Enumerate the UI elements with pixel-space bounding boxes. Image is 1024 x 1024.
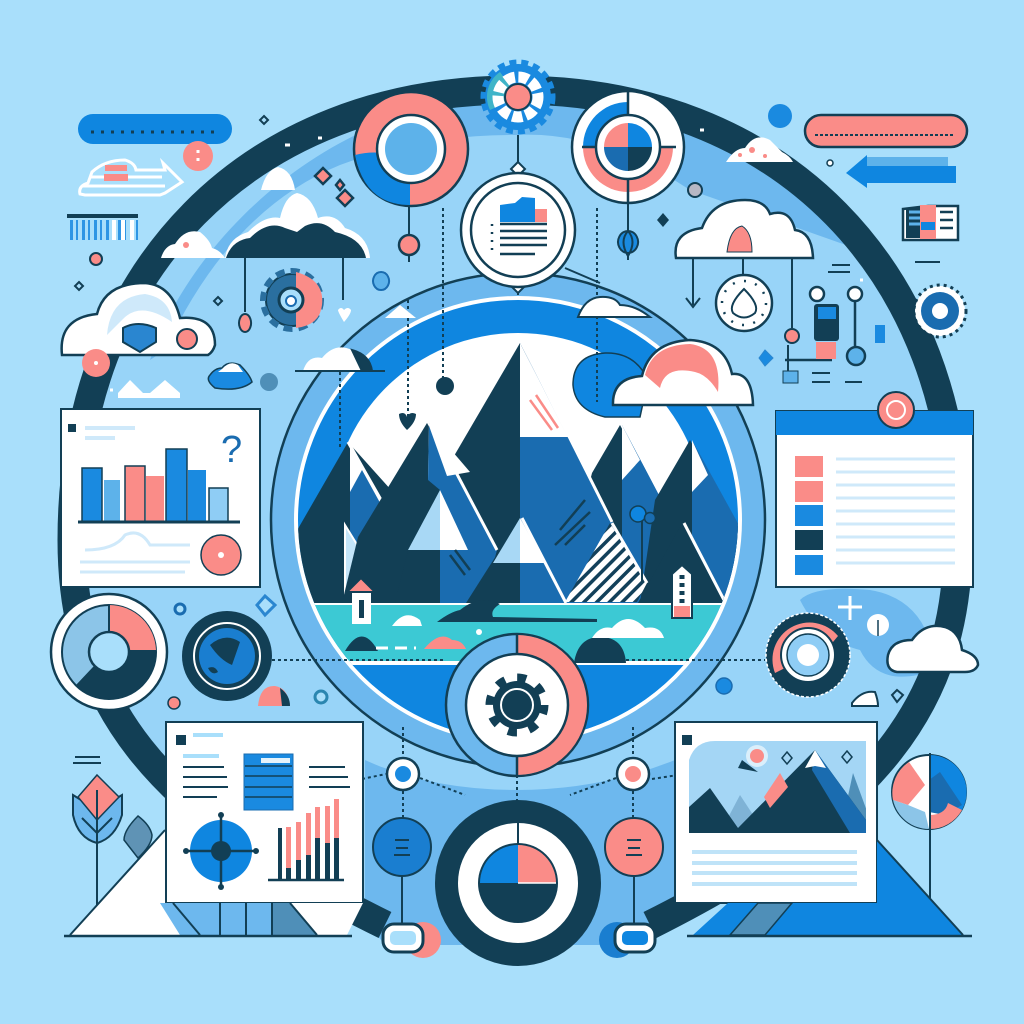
cloud: coral with blue blob <box>573 340 753 417</box>
small ring nodes <box>387 758 649 790</box>
small tree in mountains <box>630 506 656 582</box>
donut chart left <box>51 594 167 710</box>
plus sign and pin <box>838 596 889 636</box>
central mountain medallion <box>271 273 765 767</box>
panel: bar chart left: ? <box>221 429 242 471</box>
pie chart right <box>892 753 967 898</box>
gear medallion <box>446 634 588 776</box>
icon: control sliders <box>783 287 865 383</box>
connector dashes <box>272 660 765 925</box>
center document circle <box>461 173 575 287</box>
icon: globe <box>182 611 272 701</box>
cloud: large left <box>62 283 215 377</box>
icon: open book <box>903 205 958 240</box>
panel: document bottom left <box>166 722 363 903</box>
icon: sprocket right <box>914 285 966 337</box>
blue dot and ring <box>768 104 833 166</box>
icon: comb bar <box>67 216 138 230</box>
connector nodes and lines <box>340 135 743 560</box>
pill connectors at bottom <box>383 922 655 958</box>
triangle base right <box>687 840 972 936</box>
coral badge <box>183 141 213 171</box>
icon: gear dark and coral <box>263 271 322 329</box>
cloud: white right <box>676 200 813 375</box>
icon: plane <box>80 160 182 195</box>
face node blue <box>373 818 431 876</box>
top flower gear icon <box>483 62 553 132</box>
top left pill <box>78 114 232 144</box>
tower <box>672 565 692 618</box>
target circle right <box>766 613 850 697</box>
leaf plant left <box>73 775 152 905</box>
house <box>347 578 375 624</box>
panel: landscape picture bottom right <box>675 722 877 903</box>
icon: dial <box>716 275 772 331</box>
small decorative dots and icons <box>73 116 940 763</box>
sea details <box>345 600 664 663</box>
bottom large target circle <box>435 800 601 966</box>
top right quartered circle <box>572 91 684 203</box>
top right pill <box>805 115 967 147</box>
cloud: dark left <box>225 193 370 332</box>
large outer ring with interior shading <box>72 90 958 945</box>
face node coral <box>605 818 663 876</box>
small clouds <box>118 137 793 398</box>
triangle base left <box>64 830 363 936</box>
panel: bar chart left <box>61 409 260 587</box>
top donut: coral and blue <box>354 92 468 206</box>
cloud: white far right <box>887 626 978 672</box>
panel: browser window right <box>776 392 973 587</box>
arrow pointing left <box>846 155 956 188</box>
